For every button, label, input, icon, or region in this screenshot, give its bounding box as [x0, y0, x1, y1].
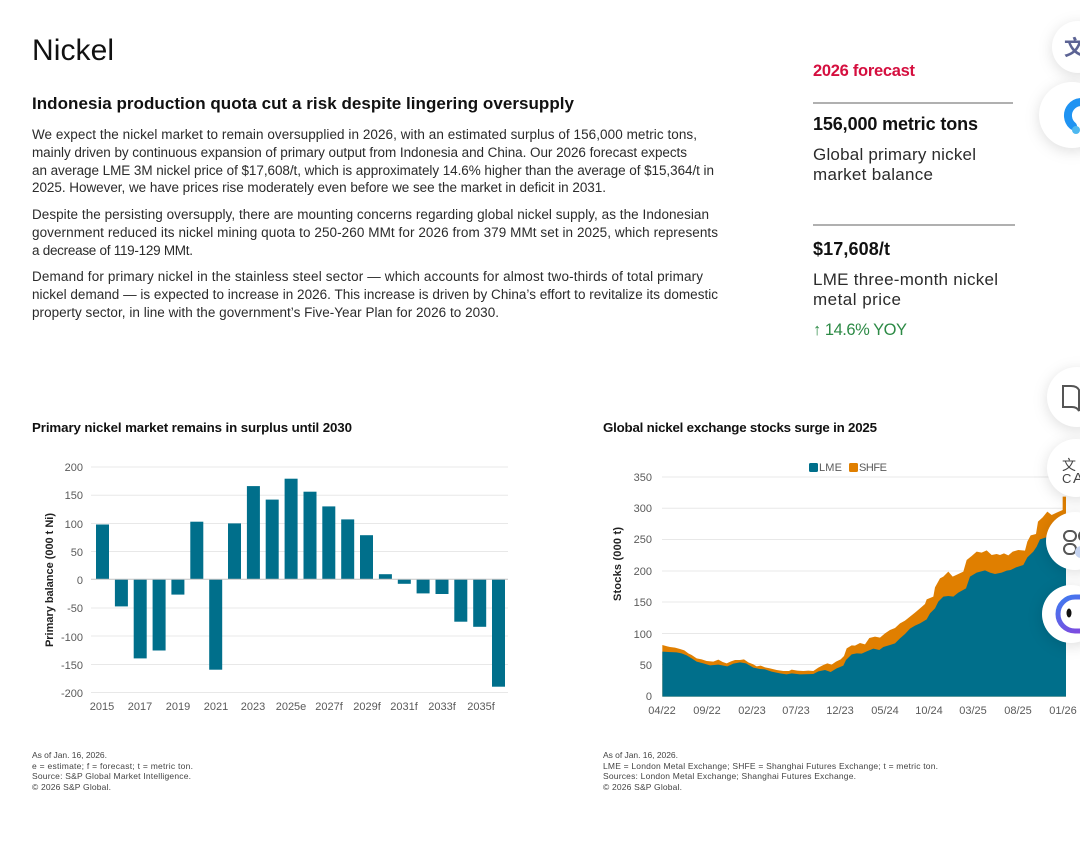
- stat: market balance: 156,000 metric tons: [813, 114, 978, 134]
- footnote: © 2026 S&P Global.: [32, 782, 111, 792]
- x axis labels: 05/24: [871, 705, 899, 717]
- y axis labels: 350: [634, 472, 652, 484]
- text block: article body: Demand for primary nickel in the stainless steel sector — which accounts for almost two-thirds of total primary: [32, 269, 703, 284]
- text block: article body: government reduced its nickel mining quota to 250-260 MMt for 2026 from 379 MMt set in 2025, which represents: [32, 225, 718, 240]
- area: LME: [662, 537, 1066, 697]
- forecast heading: 2026 forecast: [813, 62, 916, 80]
- y axis labels: [61, 462, 83, 700]
- text block: article body: a decrease of 119-129 MMt.: [32, 243, 193, 258]
- stat: nickel price: $17,608/t: [813, 239, 890, 259]
- x axis labels: 02/23: [738, 705, 766, 717]
- text block: article body: We expect the nickel market to remain oversupplied in 2026, with an estimated surplus of 156,000 metric tons,: [32, 127, 697, 142]
- footnote: [32, 750, 193, 792]
- y axis labels: [634, 472, 652, 703]
- x axis labels: 2017: [128, 701, 152, 713]
- stat: nickel price: LME three-month nickel: [813, 270, 998, 289]
- x axis labels: 2019: [166, 701, 190, 713]
- text block: article body: [32, 127, 718, 320]
- bar chart: [96, 479, 505, 687]
- y axis labels: 50: [640, 660, 652, 672]
- x axis labels: 2035f: [467, 701, 496, 713]
- y axis labels: 0: [77, 575, 83, 587]
- x axis labels: 03/25: [959, 705, 987, 717]
- footnote: [603, 750, 938, 792]
- footnote: As of Jan. 16, 2026.: [603, 750, 678, 760]
- x axis labels: 2025e: [276, 701, 306, 713]
- y axis labels: 150: [65, 490, 83, 502]
- text block: article body: nickel demand — is expected to increase in 2026. This increase is driven by China’s effort to revitalize its domestic: [32, 287, 718, 302]
- footnote: Source: S&P Global Market Intelligence.: [32, 771, 191, 781]
- y axis labels: 250: [634, 534, 652, 546]
- stat: market balance: [813, 114, 978, 184]
- heading: Indonesia production quota cut a risk despite lingering oversupply: [32, 94, 575, 113]
- y axis labels: 50: [71, 547, 83, 559]
- x axis labels: 2033f: [428, 701, 457, 713]
- text block: article body: 2025. However, we have prices rise moderately even before we see the market in deficit in 2031.: [32, 180, 606, 195]
- text block: article body: Despite the persisting oversupply, there are mounting concerns regarding global nickel supply, as the Indonesian: [32, 207, 709, 222]
- stat: market balance: market balance: [813, 165, 933, 184]
- panel: 2026 forecast: [813, 62, 1015, 339]
- y axis title: Primary balance (000 t Ni): [44, 513, 56, 647]
- legend: SHFE: [859, 462, 887, 474]
- legend: LME: [819, 462, 842, 474]
- x axis labels: 01/26: [1049, 705, 1077, 717]
- area chart: [662, 497, 1066, 697]
- text block: article body: an average LME 3M nickel price of $17,608/t, which is approximately 14.6% higher than the average of $15,364/t in: [32, 163, 714, 178]
- stat: nickel price: [813, 239, 998, 339]
- x axis labels: 12/23: [826, 705, 854, 717]
- y axis labels: -150: [61, 660, 83, 672]
- icon: language button: C: [1062, 471, 1071, 486]
- chart title: Primary nickel market remains in surplus until 2030: [32, 420, 352, 435]
- x axis labels: 2027f: [315, 701, 344, 713]
- y axis labels: 300: [634, 503, 652, 515]
- footnote: LME = London Metal Exchange; SHFE = Shanghai Futures Exchange; t = metric ton.: [603, 761, 938, 771]
- icon: AI assistant button: [1042, 585, 1080, 643]
- y axis labels: 100: [634, 629, 652, 641]
- x axis labels: 2015: [90, 701, 114, 713]
- stat: market balance: Global primary nickel: [813, 145, 976, 164]
- x axis labels: 07/23: [782, 705, 810, 717]
- footnote: e = estimate; f = forecast; t = metric ton.: [32, 761, 193, 771]
- x axis labels: [90, 701, 496, 713]
- icon: blue assistant button: [1039, 82, 1080, 148]
- x axis labels: 10/24: [915, 705, 943, 717]
- panel: exchange stocks chart: [603, 420, 1077, 792]
- icon: book button: [1047, 367, 1080, 427]
- y axis labels: -50: [67, 603, 83, 615]
- x axis labels: 2023: [241, 701, 265, 713]
- chart title: Global nickel exchange stocks surge in 2025: [603, 420, 878, 435]
- text block: article body: property sector, in line with the government’s Five-Year Plan for 2026 to 2030.: [32, 305, 499, 320]
- footnote: © 2026 S&P Global.: [603, 782, 682, 792]
- x axis labels: [648, 705, 1077, 717]
- x axis labels: 09/22: [693, 705, 721, 717]
- legend: [809, 462, 887, 474]
- y axis labels: -100: [61, 632, 83, 644]
- icon: language button: 文: [1062, 457, 1076, 473]
- stat: nickel price: metal price: [813, 290, 901, 309]
- x axis labels: 08/25: [1004, 705, 1032, 717]
- icon: translate button: [1052, 21, 1080, 73]
- icon: language button: [1047, 439, 1080, 497]
- x axis labels: 2021: [204, 701, 228, 713]
- title: Nickel: [32, 34, 114, 67]
- y axis labels: 100: [65, 519, 83, 531]
- y axis labels: 200: [634, 566, 652, 578]
- y axis labels: 150: [634, 597, 652, 609]
- text block: article body: mainly driven by continuous expansion of primary output from Indonesia and China. Our 2026 forecast expects: [32, 145, 687, 160]
- footnote: As of Jan. 16, 2026.: [32, 750, 107, 760]
- x axis labels: 2031f: [390, 701, 419, 713]
- y axis labels: 200: [65, 462, 83, 474]
- footnote: Sources: London Metal Exchange; Shanghai Futures Exchange.: [603, 771, 856, 781]
- area: SHFE: [662, 497, 1066, 697]
- icon: apps button: [1046, 512, 1080, 570]
- y axis labels: -200: [61, 688, 83, 700]
- x axis labels: 04/22: [648, 705, 676, 717]
- stat: nickel price: ↑ 14.6% YOY: [813, 321, 907, 339]
- y axis labels: 0: [646, 691, 652, 703]
- y axis title: Stocks (000 t): [612, 527, 624, 601]
- x axis labels: 2029f: [353, 701, 382, 713]
- panel: primary balance chart: [32, 420, 508, 792]
